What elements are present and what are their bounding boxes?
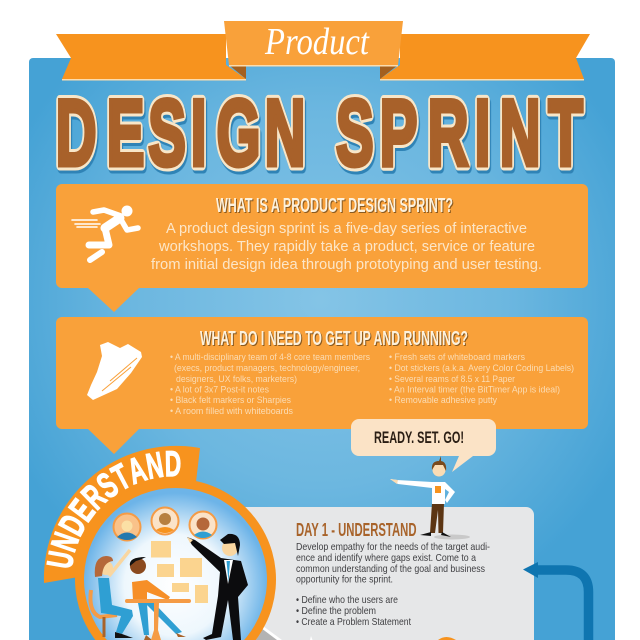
checklist: left column: • A room filled with whiteboards [170,406,293,417]
checklist: right column: • Dot stickers (a.k.a. Avery Color Coding Labels) [389,363,574,374]
description: workshops. They rapidly take a product, service or feature [158,238,535,255]
description: from initial design idea through prototyping and user testing. [151,256,542,273]
checklist: left column: • A lot of 3x7 Post-it notes [170,384,269,396]
main title: Design Sprint: DESIGN SPRINT [56,81,583,186]
description: opportunity for the sprint. [296,574,393,586]
description [296,542,490,586]
checklist: right column: • An Interval timer (the BitTimer App is ideal) [389,384,560,396]
disc [75,479,276,640]
description: A product design sprint is a five-day series of interactive [166,220,527,237]
description: Develop empathy for the needs of the target audi- [296,542,490,553]
callout: what do I need [56,317,588,454]
main title: Design Sprint: DESIGN SPRINT [56,81,583,186]
bullet list: • Define the problem [296,606,376,617]
speech bubble [351,419,496,472]
connector wedge [250,626,282,640]
callout: what is a product design sprint [56,184,588,312]
banner word: A [123,450,151,492]
sticky notes [151,541,208,603]
checklist: left column [170,352,370,417]
checklist: right column: • Several reams of 8.5 x 11 Paper [389,374,515,385]
panel: day 1 understand [240,507,534,640]
banner word: U [41,548,82,571]
bullet list: • Create a Problem Statement [296,617,411,628]
woman seated [90,550,133,638]
banner word: D [52,509,95,542]
description: ence and identify where gaps exist. Come to a [296,553,476,564]
banner [44,446,200,583]
arrow: loop back [523,562,588,640]
avatars [114,508,216,540]
man seated [130,557,186,640]
bullet list [296,595,411,628]
banner word: S [90,466,126,507]
checklist: right column: • Fresh sets of whiteboard markers [389,352,525,363]
heading: WHAT DO I NEED TO GET UP AND RUNNING? [200,328,468,350]
heading: WHAT IS A PRODUCT DESIGN SPRINT? [216,195,453,217]
title ribbon [56,21,590,80]
checklist: left column: (execs, product managers, technology/engineer, [174,363,360,374]
icon: sprinter [72,206,138,260]
character pointing [390,456,470,540]
description: common understanding of the goal and business [296,564,485,575]
man in suit [187,534,248,640]
banner word [41,445,182,571]
next section hints [310,636,312,640]
banner word: N [45,528,87,556]
checklist: right column: • Removable adhesive putty [389,395,497,406]
icon: running shoe [87,342,142,400]
checklist: left column: • Black felt markers or Sharpies [170,395,291,406]
banner word: E [62,493,103,529]
checklist: left column: • A multi-disciplinary team of 4-8 core team members [170,352,370,363]
description [151,220,542,273]
bullet list: • Define who the users are [296,595,398,606]
banner word: N [143,446,166,487]
checklist: left column: designers, UX folks, marketers) [176,374,297,385]
banner word: D [164,445,182,485]
table [125,599,191,640]
speech bubble: READY. SET. GO! [374,428,464,447]
heading: DAY 1 - UNDERSTAND [296,520,416,540]
ribbon word: Product: Product [264,21,370,63]
banner word: T [106,457,137,499]
understand badge [41,445,276,640]
banner word: R [75,477,114,517]
checklist: right column [389,352,574,406]
